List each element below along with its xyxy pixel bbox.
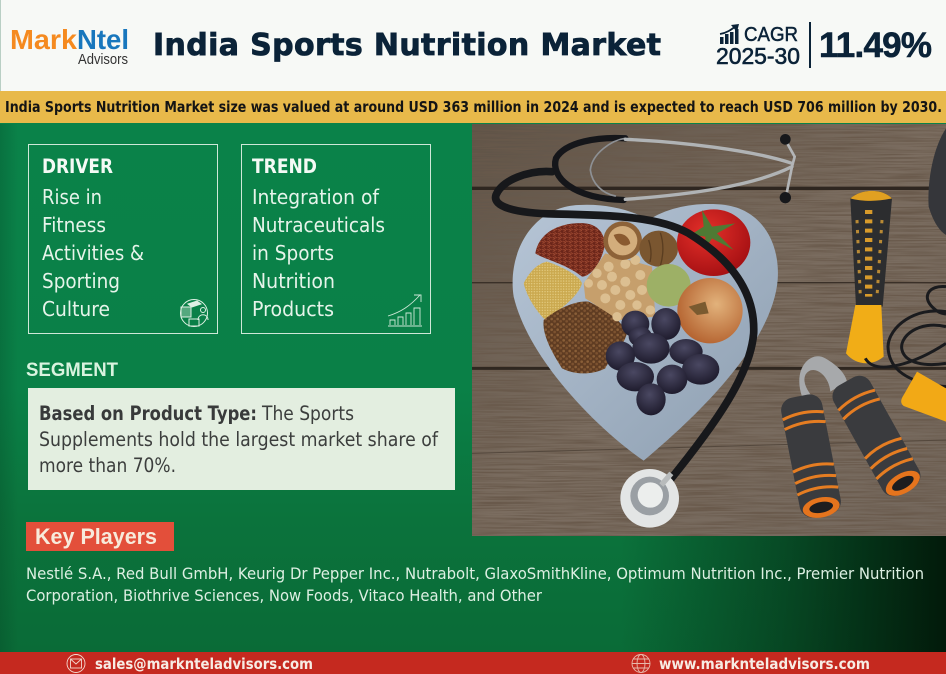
- email address: sales@marknteladvisors.com: [95, 655, 313, 673]
- heart plate: [513, 204, 778, 461]
- driver text: Rise in: [42, 185, 102, 209]
- segment heading: SEGMENT: [26, 360, 118, 381]
- icon: globe with people: [180, 300, 208, 326]
- icon: CAGR growth chart: [720, 24, 739, 44]
- logo: MarkNtel Advisors: Ntel: [77, 24, 129, 55]
- footer bar: [0, 652, 946, 674]
- logo: MarkNtel Advisors: Advisors: [78, 52, 128, 68]
- driver text: Fitness: [42, 213, 106, 237]
- walnuts: [603, 221, 678, 267]
- tomato: [677, 209, 750, 276]
- grains and legumes: [524, 223, 655, 373]
- panel: segment: [28, 388, 455, 490]
- icon: rising bar chart: [388, 295, 422, 326]
- header bar: [0, 0, 946, 91]
- trend heading: TREND: [252, 155, 317, 178]
- CAGR years: 2025-30: [716, 43, 800, 69]
- jump rope second handle: [901, 372, 946, 422]
- trend text: [252, 185, 385, 321]
- grapes: [606, 308, 719, 415]
- icon: email: [67, 654, 85, 672]
- icon: globe: [632, 654, 650, 672]
- key players list: [26, 564, 924, 605]
- title: India Sports Nutrition Market: [153, 28, 661, 63]
- summary band: [0, 91, 946, 123]
- trend text: Nutrition: [252, 269, 335, 293]
- CAGR value: 11.49%: [819, 26, 932, 65]
- panel: segment: Based on Product Type:: [39, 402, 257, 425]
- wooden table: [472, 124, 946, 536]
- driver text: Activities &: [42, 241, 144, 265]
- logo: MarkNtel Advisors: Mark: [10, 24, 77, 55]
- panel: driver: [28, 144, 218, 334]
- trend text: Integration of: [252, 185, 380, 209]
- driver text: Sporting: [42, 269, 120, 293]
- driver heading: DRIVER: [42, 155, 113, 178]
- key players list: Corporation, Biothrive Sciences, Now Foods, Vitaco Health, and Other: [26, 586, 542, 605]
- jump rope cord: [865, 287, 946, 387]
- photo: heart plate with food, stethoscope and fitness equipment: [472, 124, 946, 536]
- stethoscope: [496, 134, 795, 482]
- panel: segment: The Sports: [261, 402, 354, 425]
- jump rope handle: [846, 191, 892, 363]
- logo: MarkNtel Advisors: [10, 24, 129, 68]
- hand gripper: [779, 356, 926, 521]
- panel: segment: Supplements hold the largest market share of: [39, 428, 439, 451]
- onion: [677, 278, 743, 343]
- driver text: Culture: [42, 297, 110, 321]
- CAGR label: CAGR: [744, 24, 798, 46]
- panel: trend: [242, 144, 430, 334]
- panel: segment: more than 70%.: [39, 454, 176, 477]
- brussels sprout: [647, 264, 691, 307]
- stethoscope chest piece: [620, 469, 679, 528]
- website address: www.marknteladvisors.com: [659, 655, 870, 673]
- trend text: Nutraceuticals: [252, 213, 385, 237]
- trend text: in Sports: [252, 241, 334, 265]
- driver text: [42, 185, 144, 321]
- key players heading: Key Players: [35, 524, 157, 549]
- trend text: Products: [252, 297, 334, 321]
- shoe: [928, 128, 946, 235]
